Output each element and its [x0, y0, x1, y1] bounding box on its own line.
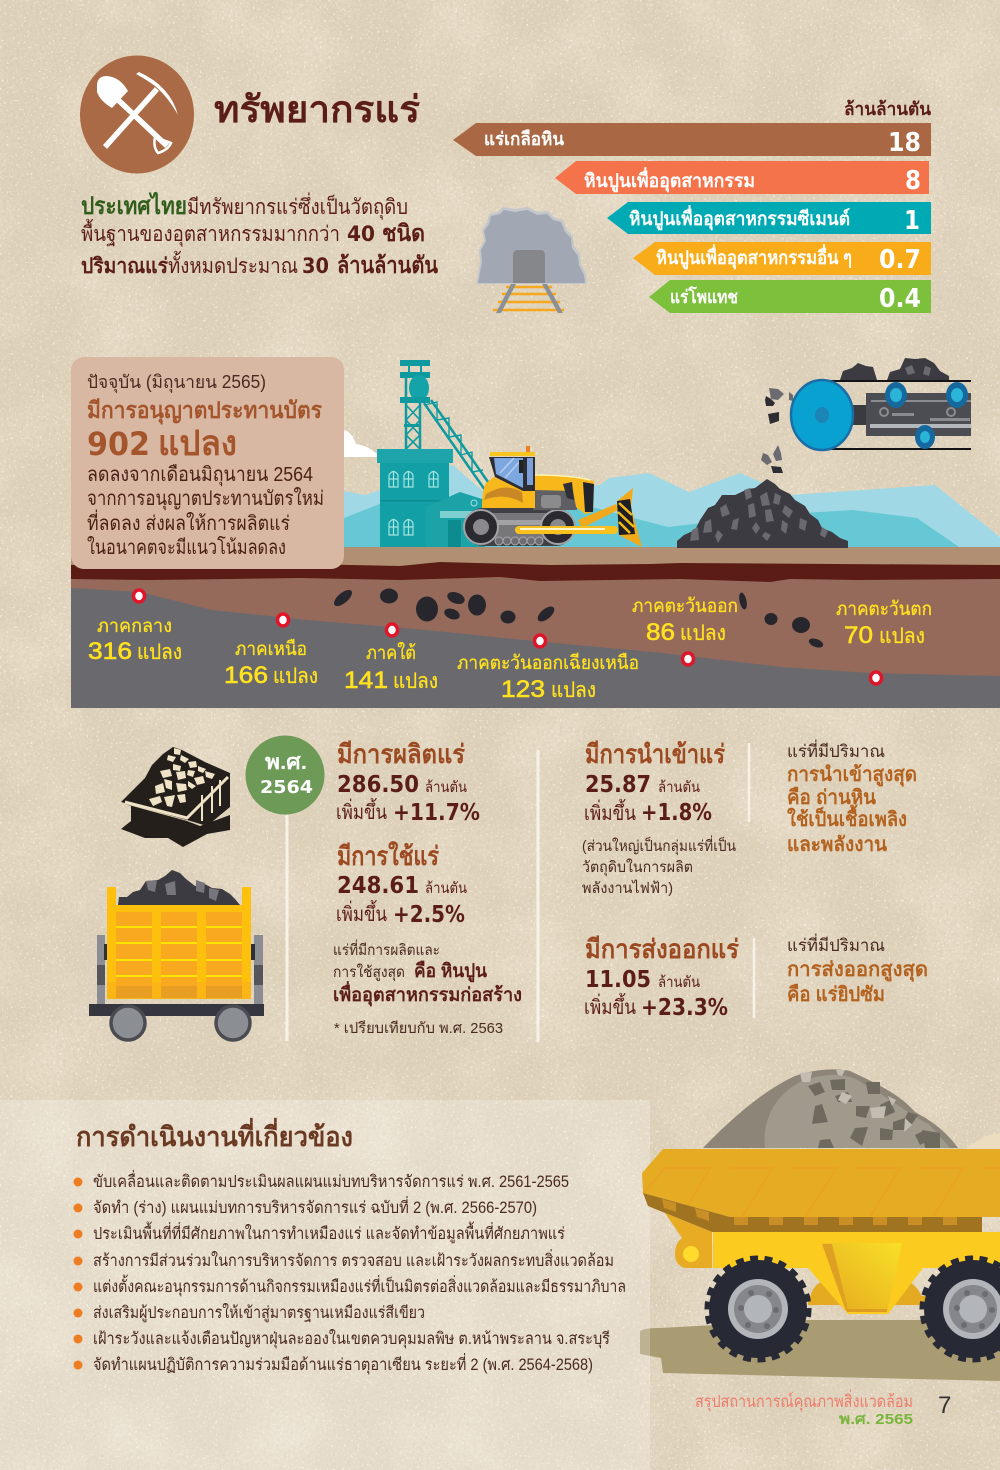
bar: rock salt: 18: [888, 128, 921, 158]
callout: license panel: 902: [87, 425, 150, 463]
stat: imports: 25.87: [585, 772, 651, 798]
region: central: [88, 616, 182, 665]
stat: exports: [584, 934, 739, 1021]
region: central: 316: [88, 638, 132, 665]
conveyor belt: [791, 358, 971, 450]
panel: related operations: ขับเคลื่อนและติดตามประเมินผลแผนแม่บทบริหารจัดการแร่ พ.ศ. 2561-2565: [93, 1170, 569, 1191]
intro text: ทั้งหมดประมาณ: [168, 251, 298, 278]
intro text: พื้นฐานของอุตสาหกรรมมากกว่า: [81, 219, 340, 247]
bar: industrial limestone: 8: [905, 166, 921, 196]
bar: industrial limestone: [555, 161, 929, 196]
region pins: [134, 590, 882, 684]
footer publication title: [695, 1389, 913, 1428]
region: east: [632, 596, 738, 646]
region: south: [344, 642, 438, 694]
note: top import: [787, 739, 917, 856]
region: east: 86: [646, 619, 675, 646]
panel: related operations: แต่งตั้งคณะอนุกรรมการด้านกิจกรรมเหมืองแร่ที่เป็นมิตรต่อสิ่งแวดล้อมและมีธรรมาภิบาล: [93, 1274, 626, 1297]
bar: other limestone: [633, 242, 931, 275]
stat: production: +11.7%: [393, 800, 480, 826]
intro text: ล้านล้านตัน: [337, 252, 438, 278]
stat: production: ล้านตัน: [425, 779, 467, 796]
note: top import: และพลังงาน: [787, 834, 887, 856]
intro text: มีทรัพยากรแร่ซึ่งเป็นวัตถุดิบ: [187, 192, 408, 220]
note: top export: คือ แร่ยิปซัม: [787, 983, 885, 1006]
callout: license panel: ปัจจุบัน (มิถุนายน 2565): [87, 372, 266, 393]
note: highest production and use: [333, 939, 522, 1007]
note: import detail: [582, 835, 736, 897]
region: central: ภาคกลาง: [97, 616, 172, 637]
bar: rock salt: แร่เกลือหิน: [484, 129, 565, 149]
icon: black ore bin: [121, 747, 230, 847]
panel: related operations: ส่งเสริมผู้ประกอบการให้เข้าสู่มาตรฐานเหมืองแร่สีเขียว: [93, 1303, 425, 1323]
callout: license panel: แปลง: [158, 424, 237, 463]
callout: license panel: ลดลงจากเดือนมิถุนายน 2564: [87, 464, 313, 487]
note: top export: การส่งออกสูงสุด: [787, 959, 928, 983]
intro text: 40: [347, 222, 375, 246]
bar: industrial limestone: หินปูนเพื่ออุตสาหกรรม: [584, 167, 755, 193]
region: northeast: แปลง: [551, 679, 596, 702]
callout: license panel: ที่ลดลง ส่งผลให้การผลิตแร่: [87, 509, 290, 535]
header icon: shovel and pickaxe: [80, 56, 194, 174]
stat: production: เพิ่มขึ้น: [336, 798, 387, 824]
stat: imports: มีการนำเข้าแร่: [585, 739, 725, 769]
stat: production: [336, 739, 480, 826]
note: top export: [787, 933, 928, 1006]
note: top import: ใช้เป็นเชื้อเพลิง: [787, 804, 907, 831]
stat: exports: มีการส่งออกแร่: [585, 934, 739, 964]
note: highest production and use: เพื่ออุตสาหกรรมก่อสร้าง: [333, 981, 522, 1007]
intro text: 30: [302, 254, 329, 278]
note: import detail: วัตถุดิบในการผลิต: [582, 858, 693, 877]
mining scene: [71, 360, 1000, 708]
region: west: ภาคตะวันตก: [836, 599, 932, 620]
stat: imports: เพิ่มขึ้น: [584, 799, 636, 825]
bar: cement limestone: 1: [904, 206, 920, 236]
region: east: แปลง: [680, 622, 726, 645]
region: northeast: [457, 652, 639, 703]
dump truck: [642, 1069, 1000, 1360]
coal pile: [677, 479, 848, 548]
region: northeast: 123: [501, 676, 545, 703]
stat: consumption: +2.5%: [393, 902, 465, 928]
stat: imports: +1.8%: [641, 800, 712, 826]
bar: rock salt: [453, 123, 931, 158]
note: top import: คือ ถ่านหิน: [787, 786, 876, 809]
callout: license panel: มีการอนุญาตประทานบัตร: [87, 397, 323, 425]
intro text: ประเทศไทย: [81, 191, 187, 220]
bar: potash: แร่โพแทช: [670, 286, 738, 307]
year badge: 2564: [260, 777, 313, 798]
stat: consumption: เพิ่มขึ้น: [336, 900, 387, 926]
region: south: ภาคใต้: [366, 642, 416, 664]
region: north: ภาคเหนือ: [235, 639, 307, 660]
note: top import: การนำเข้าสูงสุด: [787, 763, 917, 788]
panel: related operations: สร้างการมีส่วนร่วมในการบริหารจัดการ ตรวจสอบ และเฝ้าระวังผลกระทบสิ่งแวดล้อม: [93, 1249, 614, 1270]
region: south: 141: [344, 667, 388, 694]
hills: [344, 430, 1000, 547]
panel: related operations: [0, 1100, 650, 1470]
panel: related operations: จัดทำแผนปฏิบัติการความร่วมมือด้านแร่ธาตุอาเซียน ระยะที่ 2 (พ.ศ. 2564-2568): [93, 1353, 593, 1375]
bar: potash: [649, 280, 931, 314]
region: north: 166: [224, 662, 268, 689]
stat: exports: ล้านตัน: [658, 974, 700, 991]
panel: related operations: เฝ้าระวังและแจ้งเตือนปัญหาฝุ่นละอองในเขตควบคุมมลพิษ ต.หน้าพระลาน จ.สระบุรี: [93, 1329, 610, 1349]
region: north: [224, 639, 318, 689]
stat: consumption: ล้านตัน: [425, 880, 467, 897]
icon: yellow mine cart: [89, 870, 264, 1040]
stat: consumption: [336, 841, 467, 928]
callout: license panel: จากการอนุญาตประทานบัตรใหม่: [87, 487, 324, 511]
region: central: แปลง: [137, 641, 182, 664]
callout: license panel: [71, 357, 344, 569]
bar: cement limestone: หินปูนเพื่ออุตสาหกรรมซีเมนต์: [629, 205, 850, 231]
stat: imports: ล้านตัน: [658, 779, 700, 796]
intro text: ปริมาณแร่: [81, 255, 169, 278]
truck shadow: [640, 1320, 1000, 1381]
note: highest production and use: แร่ที่มีการผลิตและ: [333, 939, 440, 959]
unit label: ล้านล้านตัน: [844, 99, 932, 119]
region: northeast: ภาคตะวันออกเฉียงเหนือ: [457, 652, 639, 674]
stat: production: มีการผลิตแร่: [337, 739, 465, 769]
stat: imports: [584, 739, 725, 826]
bar: potash: 0.4: [879, 284, 921, 314]
region: south: แปลง: [393, 670, 438, 693]
underground coal deposits: [331, 587, 824, 649]
bar: cement limestone: [607, 202, 931, 236]
note: top export: แร่ที่มีปริมาณ: [787, 933, 885, 955]
intro text: [81, 191, 438, 278]
divider lines: [287, 743, 754, 1042]
footer publication title: พ.ศ. 2565: [839, 1411, 913, 1428]
callout: license panel: ในอนาคตจะมีแนวโน้มลดลง: [87, 536, 286, 559]
icon: mine tunnel: [476, 207, 587, 313]
panel: related operations: ประเมินพื้นที่ที่มีศักยภาพในการทำเหมืองแร่ และจัดทำข้อมูลพื้นที่ศักยภาพแร่: [93, 1221, 565, 1244]
page number: 7: [938, 1392, 951, 1419]
footer publication title: สรุปสถานการณ์คุณภาพสิ่งแวดล้อม: [695, 1389, 913, 1412]
stat: exports: +23.3%: [641, 995, 728, 1021]
region: east: ภาคตะวันออก: [632, 596, 738, 617]
bulldozer: [464, 446, 642, 547]
region: north: แปลง: [273, 665, 318, 688]
footnote: * เปรียบเทียบกับ พ.ศ. 2563: [334, 1020, 503, 1037]
stat: exports: 11.05: [585, 967, 651, 993]
region: west: 70: [844, 622, 873, 649]
bar: other limestone: หินปูนเพื่ออุตสาหกรรมอื่น ๆ: [656, 244, 852, 270]
bar: other limestone: 0.7: [879, 245, 921, 275]
intro text: ชนิด: [382, 220, 425, 246]
note: highest production and use: การใช้สูงสุด: [333, 963, 405, 982]
note: top import: แร่ที่มีปริมาณ: [787, 739, 885, 761]
panel: related operations: จัดทำ (ร่าง) แผนแม่บทการบริหารจัดการแร่ ฉบับที่ 2 (พ.ศ. 2566-2570): [93, 1196, 537, 1217]
stat: production: 286.50: [337, 772, 419, 798]
stat: consumption: มีการใช้แร่: [337, 841, 439, 871]
stat: exports: เพิ่มขึ้น: [584, 993, 636, 1019]
panel: related operations: การดำเนินงานที่เกี่ยวข้อง: [76, 1117, 353, 1152]
year badge: พ.ศ.: [265, 751, 307, 774]
region: west: แปลง: [879, 625, 925, 648]
falling coal rocks: [761, 388, 793, 473]
headframe tower and building: [377, 360, 488, 547]
region: west: [836, 599, 932, 649]
year badge: [246, 736, 324, 814]
title: ทรัพยากรแร่: [214, 89, 420, 130]
stat: consumption: 248.61: [337, 873, 419, 899]
note: import detail: (ส่วนใหญ่เป็นกลุ่มแร่ที่เป็น: [582, 835, 736, 856]
note: highest production and use: คือ หินปูน: [414, 960, 487, 983]
ground layers: [71, 547, 1000, 566]
note: import detail: พลังงานไฟฟ้า): [582, 879, 673, 897]
